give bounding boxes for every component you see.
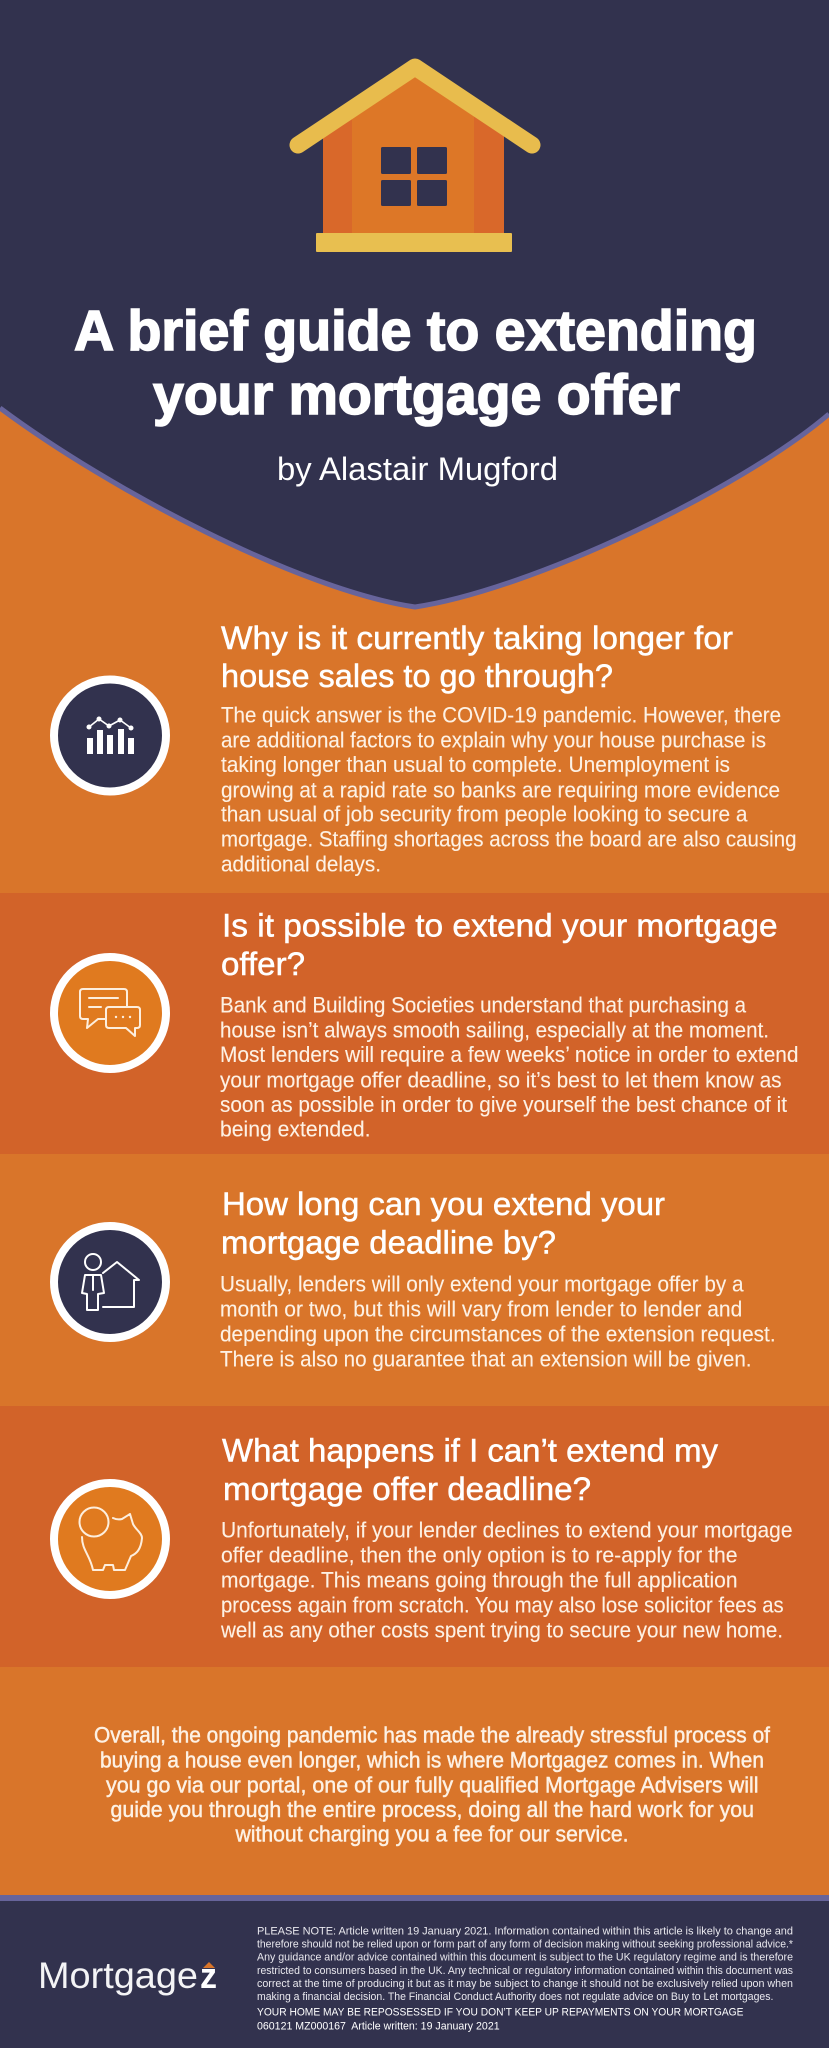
body text: Most lenders will require a few weeks’ notice in order to extend <box>220 1042 798 1067</box>
icon: bar chart with trend line <box>54 680 166 792</box>
heading <box>221 620 733 694</box>
body text: offer deadline, then the only option is to re-apply for the <box>221 1543 738 1568</box>
heading: offer? <box>221 946 305 982</box>
body text: mortgage. This means going through the full application <box>221 1568 738 1593</box>
heading: house sales to go through? <box>221 658 613 694</box>
icon: speech bubbles <box>54 957 166 1069</box>
conclusion text: you go via our portal, one of our fully qualified Mortgage Advisers will <box>106 1772 758 1797</box>
panel: footer <box>0 1895 829 2048</box>
heading: mortgage offer deadline? <box>223 1471 591 1507</box>
body text: There is also no guarantee that an extension will be given. <box>220 1347 752 1372</box>
title: A brief guide to extending <box>74 299 757 363</box>
panel: header <box>0 0 829 607</box>
body text: Bank and Building Societies understand that purchasing a <box>220 993 747 1018</box>
body text: are additional factors to explain why your house purchase is <box>221 727 766 752</box>
body text: taking longer than usual to complete. Unemployment is <box>221 752 730 777</box>
disclaimer text: YOUR HOME MAY BE REPOSSESSED IF YOU DON’T KEEP UP REPAYMENTS ON YOUR MORTGAGE <box>257 2007 744 2019</box>
logo: Mortgagez: z <box>200 1955 217 1996</box>
heading <box>222 1433 718 1507</box>
heading: Is it possible to extend your mortgage <box>222 908 778 944</box>
conclusion text <box>94 1723 771 1847</box>
body text: house isn’t always smooth sailing, especially at the moment. <box>220 1017 769 1042</box>
heading <box>221 908 778 982</box>
body text: process again from scratch. You may also lose solicitor fees as <box>221 1592 784 1617</box>
body text: Usually, lenders will only extend your mortgage offer by a <box>220 1272 744 1297</box>
icon: house <box>298 67 532 252</box>
conclusion text: buying a house even longer, which is where Mortgagez comes in. When <box>100 1747 764 1772</box>
logo: Mortgagez: Mortgage <box>38 1955 198 1996</box>
disclaimer text: making a financial decision. The Financial Conduct Authority does not regulate advice on Buy to Let mortgages. <box>257 1991 773 2003</box>
body text: The quick answer is the COVID-19 pandemic. However, there <box>221 703 781 728</box>
title: your mortgage offer <box>153 363 680 427</box>
disclaimer text: correct at the time of producing it but as it may be subject to change it should not be exclusively relied upon when <box>257 1978 793 1990</box>
body text: growing at a rapid rate so banks are requiring more evidence <box>221 777 780 802</box>
icon: person and house <box>54 1226 166 1338</box>
body text <box>220 1518 792 1642</box>
disclaimer text: restricted to consumers based in the UK. Any technical or regulatory information contained within this document was <box>257 1965 793 1977</box>
heading: What happens if I can’t extend my <box>222 1433 718 1469</box>
body text: being extended. <box>220 1117 370 1142</box>
disclaimer text <box>257 1925 794 2032</box>
disclaimer text: PLEASE NOTE: Article written 19 January 2021. Information contained within this article is likely to change and <box>257 1925 793 1937</box>
body text: well as any other costs spent trying to secure your new home. <box>220 1617 783 1642</box>
body text: mortgage. Staffing shortages across the board are also causing <box>221 827 796 852</box>
disclaimer text: therefore should not be relied upon or form part of any form of decision making without seeking professional advice.* <box>257 1939 794 1951</box>
heading <box>221 1186 665 1260</box>
body text <box>221 703 796 877</box>
byline: by Alastair Mugford <box>277 451 558 487</box>
heading: mortgage deadline by? <box>221 1224 556 1260</box>
disclaimer text: 060121 MZ000167 Article written: 19 January 2021 <box>257 2020 500 2032</box>
icon: piggy bank and coin <box>54 1483 166 1595</box>
heading: Why is it currently taking longer for <box>221 620 733 656</box>
body text <box>220 993 798 1142</box>
disclaimer text: Any guidance and/or advice contained within this document is subject to the UK regulatory regime and is therefore <box>257 1952 793 1964</box>
panel: what happens if I can't extend <box>0 1406 829 1667</box>
panel: how long can you extend <box>54 1186 776 1372</box>
body text: Unfortunately, if your lender declines to extend your mortgage <box>221 1518 792 1543</box>
conclusion text: without charging you a fee for our service. <box>235 1822 628 1847</box>
body text: additional delays. <box>221 852 381 877</box>
conclusion text: guide you through the entire process, doing all the hard work for you <box>110 1797 754 1822</box>
title <box>74 299 757 427</box>
panel: why is it taking longer <box>54 620 796 877</box>
heading: How long can you extend your <box>222 1186 665 1222</box>
panel: is it possible to extend <box>0 893 829 1154</box>
body text: than usual of job security from people looking to secure a <box>221 802 748 827</box>
body text: month or two, but this will vary from lender to lender and <box>220 1297 742 1322</box>
body text: soon as possible in order to give yourself the best chance of it <box>220 1092 787 1117</box>
conclusion text: Overall, the ongoing pandemic has made the already stressful process of <box>94 1723 771 1748</box>
body text <box>220 1272 776 1372</box>
body text: your mortgage offer deadline, so it’s best to let them know as <box>220 1067 782 1092</box>
body text: depending upon the circumstances of the extension request. <box>220 1322 776 1347</box>
